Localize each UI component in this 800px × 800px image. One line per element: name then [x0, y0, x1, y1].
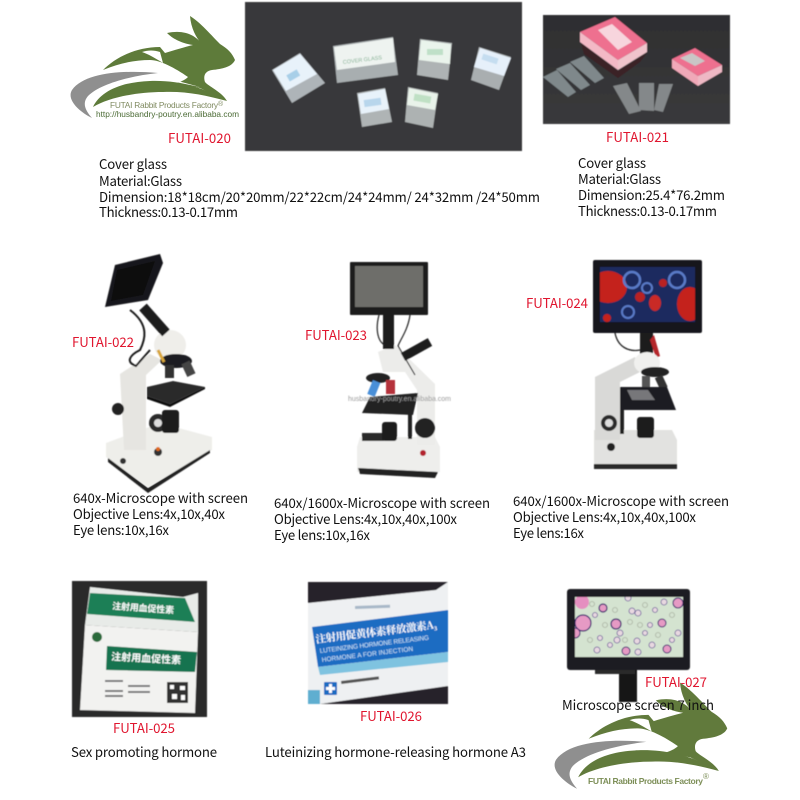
maker line — [341, 676, 379, 684]
base — [357, 437, 440, 472]
knobs — [112, 403, 124, 415]
white leaf in wing — [142, 50, 163, 63]
text block: cover glass right: Material:Glass — [578, 169, 661, 188]
cables — [130, 310, 150, 366]
stage — [620, 387, 676, 410]
nosepiece — [641, 367, 669, 377]
stage — [147, 381, 205, 404]
light blue stripe — [318, 652, 448, 675]
photo: LHRH A3 box — [308, 582, 448, 704]
registered mark: ® — [218, 100, 224, 108]
text block: cover glass right: Dimension:25.4*76.2mm — [578, 185, 725, 204]
microscope: FUTAI-024 — [589, 260, 703, 469]
text block: cover glass left: Dimension:18*18cm/20*20mm/22*22cm/24*24mm/ 24*32mm /24*50mm — [99, 187, 540, 206]
watermark: husbandry-poutry.en.alibaba.com — [348, 396, 451, 403]
logo url: http://husbandry-poutry.en.alibaba.com — [96, 109, 239, 119]
eyepiece tube — [403, 342, 430, 357]
head — [634, 352, 660, 374]
box front — [80, 625, 198, 713]
small pink box — [672, 48, 722, 86]
microscope: FUTAI-023 — [348, 262, 451, 478]
green swoosh — [93, 81, 227, 107]
stage — [362, 393, 418, 415]
text block: cover glass right — [578, 153, 725, 220]
rabbit shapes — [555, 683, 727, 789]
text block: cover glass left — [99, 154, 540, 221]
box 4 — [471, 47, 511, 90]
slides set 2 — [613, 83, 673, 114]
label: FUTAI-025: FUTAI-025 — [113, 718, 175, 737]
post — [383, 315, 394, 349]
box 3 — [417, 39, 452, 80]
QR code — [167, 682, 188, 703]
label: FUTAI-021: FUTAI-021 — [606, 127, 669, 146]
photo: cover glass boxes — [245, 2, 522, 151]
photo: sex promoting hormone box — [72, 581, 207, 717]
logo: bottom right rabbit — [555, 683, 727, 789]
text: microscope screen 7 inch: Microscope screen 7 inch — [562, 695, 714, 714]
logo name: FUTAI Rabbit Products Factory — [588, 776, 703, 786]
front text: 注射用血促性素 — [111, 648, 182, 667]
rabbit body — [103, 16, 235, 101]
text block: FUTAI-023 specs — [274, 493, 490, 544]
head — [154, 330, 186, 360]
column and arm — [595, 357, 640, 440]
large pink box — [580, 17, 647, 78]
text block: FUTAI-023 specs: Objective Lens:4x,10x,40x,100x — [274, 509, 457, 528]
label: FUTAI-027: FUTAI-027 — [645, 672, 707, 691]
cables — [377, 315, 415, 375]
label: FUTAI-020: FUTAI-020 — [168, 128, 231, 147]
dark top — [308, 582, 448, 603]
text block: FUTAI-024 specs: Objective Lens:4x,10x,40x,100x — [513, 507, 696, 526]
text block: FUTAI-022 specs: Eye lens:10x,16x — [73, 520, 169, 539]
text block: cover glass left: Thickness:0.13-0.17mm — [99, 202, 238, 221]
box 5 — [357, 88, 392, 127]
screen — [350, 262, 428, 315]
text block: cover glass left: Material:Glass — [99, 171, 182, 190]
white wedge between body and swoosh — [174, 80, 200, 87]
base — [106, 423, 212, 487]
text block: FUTAI-023 specs: Eye lens:10x,16x — [274, 525, 370, 544]
photo: LHRH A3 box: HORMONE A FOR INJECTION — [321, 646, 414, 664]
screen — [593, 260, 702, 333]
text block: FUTAI-022 specs — [73, 488, 248, 539]
logo: top left rabbit — [71, 16, 239, 119]
slides set 1 — [543, 56, 604, 97]
grey swoosh — [71, 72, 158, 118]
post — [640, 333, 653, 357]
box 2: COVER GLASS — [343, 55, 383, 66]
text block: FUTAI-024 specs: Eye lens:16x — [513, 523, 584, 542]
English title: LUTEINIZING HORMONE RELEASING — [319, 635, 429, 655]
registered mark: ® — [703, 772, 709, 781]
cross icon — [324, 682, 337, 695]
photo: cover glass slides with pink boxes — [543, 15, 730, 124]
info lines — [105, 680, 150, 697]
text: luteinizing hormone: Luteinizing hormone-releasing hormone A3 — [265, 742, 526, 761]
text block: FUTAI-022 specs: Objective Lens:4x,10x,40x — [73, 504, 225, 523]
eyepiece — [637, 417, 654, 438]
label: FUTAI-023: FUTAI-023 — [305, 325, 367, 344]
knob — [601, 415, 617, 431]
label: FUTAI-022: FUTAI-022 — [72, 332, 134, 351]
eyepiece — [382, 422, 397, 441]
text block: cover glass left: Cover glass — [99, 154, 167, 173]
connector arm — [143, 307, 166, 333]
knob — [415, 418, 435, 438]
screen — [105, 254, 163, 307]
logo mark — [92, 632, 102, 642]
flap text: 注射用血促性素 — [112, 599, 175, 616]
nosepiece — [160, 354, 192, 368]
blue band — [312, 610, 448, 667]
box 6 — [405, 87, 438, 128]
text block: FUTAI-023 specs: 640x/1600x-Microscope with screen — [274, 493, 490, 512]
text: sex promoting hormone: Sex promoting hormone — [71, 742, 217, 761]
CJK title: 注射用促黄体素释放激素A₃ — [315, 617, 438, 647]
label: FUTAI-024: FUTAI-024 — [526, 293, 588, 312]
text block: FUTAI-024 specs: 640x/1600x-Microscope with screen — [513, 491, 729, 510]
text block: FUTAI-022 specs: 640x-Microscope with screen — [73, 488, 248, 507]
label: FUTAI-026: FUTAI-026 — [360, 706, 422, 725]
microscope: FUTAI-022 — [105, 254, 212, 493]
text block: cover glass right: Cover glass — [578, 153, 646, 172]
box 1 — [272, 53, 325, 103]
box flap — [85, 587, 198, 632]
text block: FUTAI-024 specs — [513, 491, 729, 542]
column — [120, 354, 162, 450]
base — [594, 430, 677, 464]
column and arm — [378, 345, 435, 445]
dark bottom — [320, 686, 448, 704]
photo: 7 inch microscope screen — [567, 589, 690, 702]
box 2 — [333, 37, 398, 83]
objectives — [366, 373, 390, 383]
text block: cover glass right: Thickness:0.13-0.17mm — [578, 201, 717, 220]
logo name: FUTAI Rabbit Products Factory — [110, 100, 219, 110]
